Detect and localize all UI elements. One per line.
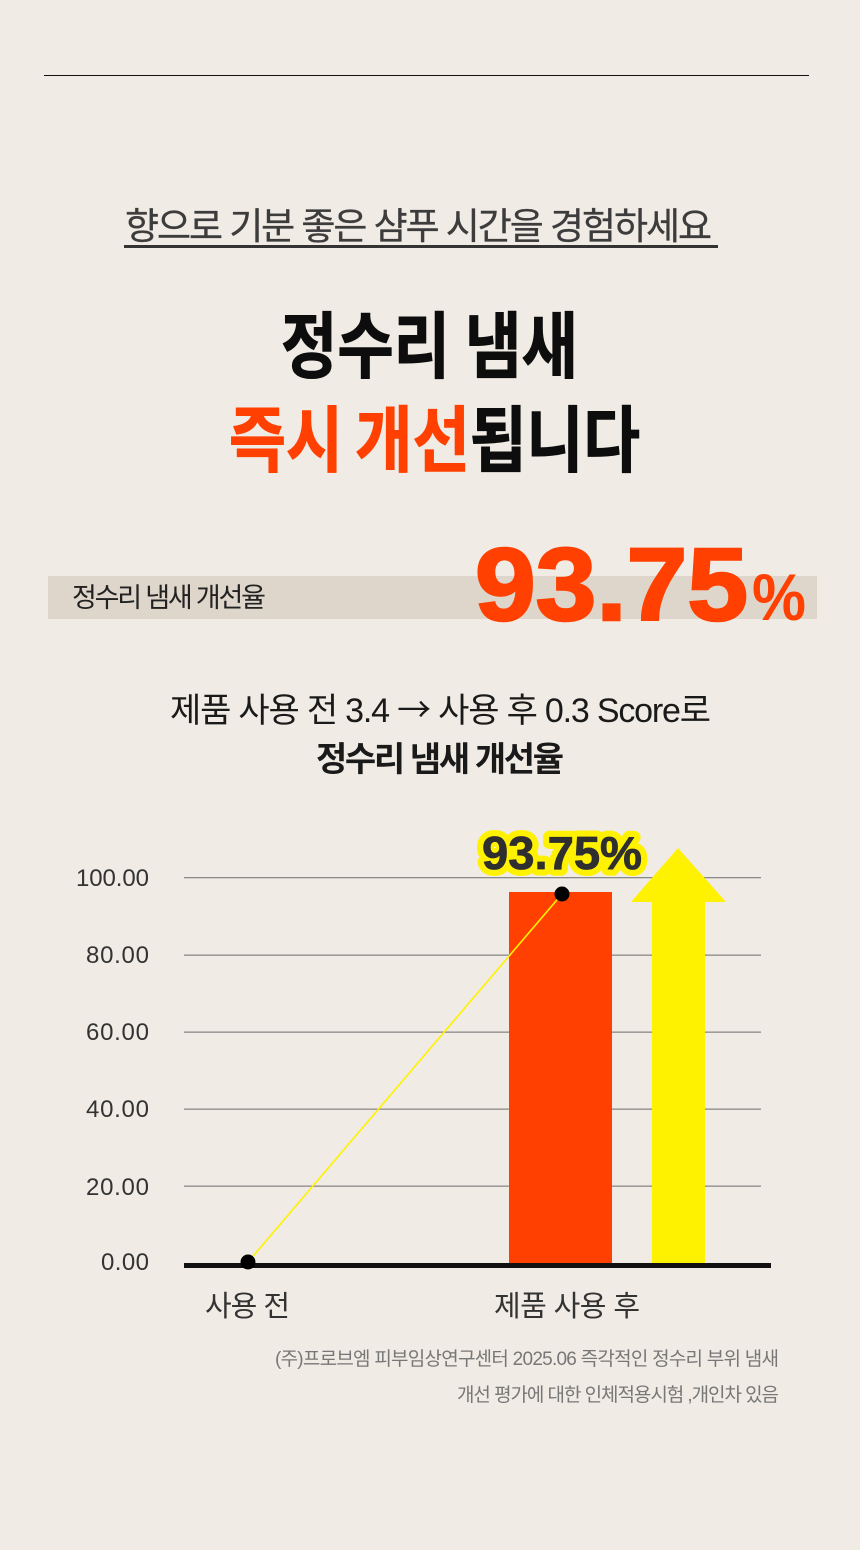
- subheading: 향으로 기분 좋은 샴푸 시간을 경험하세요: [125, 206, 712, 247]
- y axis labels: 20.00: [86, 1174, 149, 1201]
- title: 냄새: [465, 308, 578, 388]
- y axis labels: 60.00: [86, 1019, 149, 1046]
- description: 제품 사용 전 3.4 → 사용 후 0.3 Score로: [170, 683, 711, 732]
- bar chart: [76, 827, 771, 1323]
- x axis labels: [205, 1291, 640, 1323]
- title: 개선: [355, 402, 470, 482]
- x axis labels: 제품 사용 후: [494, 1291, 640, 1323]
- title: [229, 308, 640, 482]
- stat bar: improvement rate: %: [752, 560, 806, 634]
- footnote: (주)프로브엠 피부임상연구센터 2025.06 즉각적인 정수리 부위 냄새: [275, 1348, 779, 1370]
- stat bar: improvement rate: 93.75: [475, 527, 748, 642]
- arrow: upward: [631, 848, 726, 1263]
- value label: 93.75%: [482, 827, 642, 879]
- bar: after use: [509, 892, 612, 1264]
- description: 정수리 냄새 개선율: [316, 741, 564, 779]
- y axis labels: 100.00: [76, 865, 149, 892]
- title: 즉시: [229, 402, 343, 482]
- y axis labels: 40.00: [86, 1096, 149, 1123]
- stat bar: improvement rate: [48, 527, 817, 642]
- y axis labels: [76, 865, 149, 1276]
- trend line: [240, 886, 570, 1270]
- y axis labels: 0.00: [101, 1249, 149, 1276]
- y axis labels: 80.00: [86, 942, 149, 969]
- value label: 93.75%: [482, 827, 642, 879]
- x axis labels: 사용 전: [205, 1291, 290, 1323]
- description: [170, 683, 711, 779]
- stat bar: improvement rate: 정수리 냄새 개선율: [72, 583, 266, 613]
- footnote: 개선 평가에 대한 인체적용시험 ,개인차 있음: [457, 1384, 779, 1406]
- title: 정수리: [281, 308, 450, 388]
- title: 됩니다: [470, 402, 640, 482]
- footnote: [275, 1348, 779, 1406]
